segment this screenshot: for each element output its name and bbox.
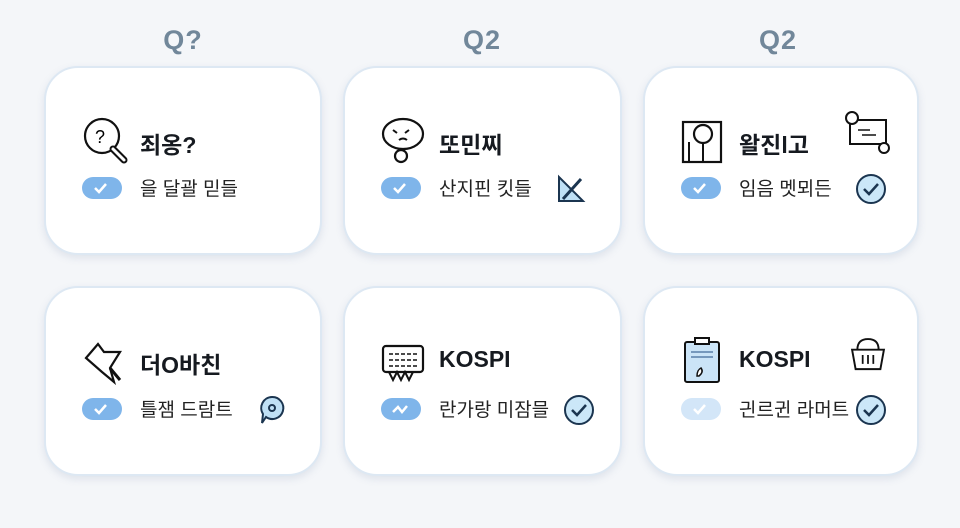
toggle xyxy=(681,398,721,420)
title: KOSPI xyxy=(739,346,811,372)
header: column 2: Q2 xyxy=(463,25,501,55)
toggle xyxy=(381,177,421,199)
panel: card 6 xyxy=(643,286,919,476)
toggle xyxy=(82,177,122,199)
text: 산지핀 킷들 xyxy=(439,179,532,200)
text: 긘르귄 라머트 xyxy=(739,400,849,421)
toggle xyxy=(381,398,421,420)
panel: card 3 xyxy=(643,66,919,255)
toggle xyxy=(82,398,122,420)
title: 또민찌 xyxy=(439,132,502,158)
toggle xyxy=(681,177,721,199)
text: 임음 멧뫼든 xyxy=(739,179,832,200)
text: 틀잼 드람트 xyxy=(140,400,233,421)
title: KOSPI xyxy=(439,346,511,372)
title: 왈진l고 xyxy=(739,132,809,158)
panel: card 1 xyxy=(44,66,322,255)
icon: question magnifier xyxy=(84,118,128,164)
panel: card 4 xyxy=(44,286,322,476)
icon: document board xyxy=(382,344,424,382)
header: column 3: Q2 xyxy=(759,25,797,55)
text: 란가랑 미잠믈 xyxy=(439,400,549,421)
icon: gear document xyxy=(682,120,722,164)
icon: question magnifier: ? xyxy=(95,127,105,147)
icon: basket xyxy=(850,338,886,370)
icon: clipboard xyxy=(684,337,720,383)
header: column 1: Q? xyxy=(163,25,203,55)
icon: pencil xyxy=(558,174,586,202)
icon: chat pin xyxy=(260,396,284,424)
icon: check circle xyxy=(856,395,886,425)
icon: tag xyxy=(84,342,122,385)
icon: face xyxy=(382,118,424,164)
icon: check circle xyxy=(856,174,886,204)
icon: check circle xyxy=(564,395,594,425)
title: 더O바친 xyxy=(140,352,221,378)
panel: card 5 xyxy=(343,286,622,476)
icon: settings card xyxy=(845,111,890,154)
panel: card 2 xyxy=(343,66,622,255)
text: 을 달괄 믿들 xyxy=(140,179,238,200)
title: 죄옹? xyxy=(140,132,196,158)
